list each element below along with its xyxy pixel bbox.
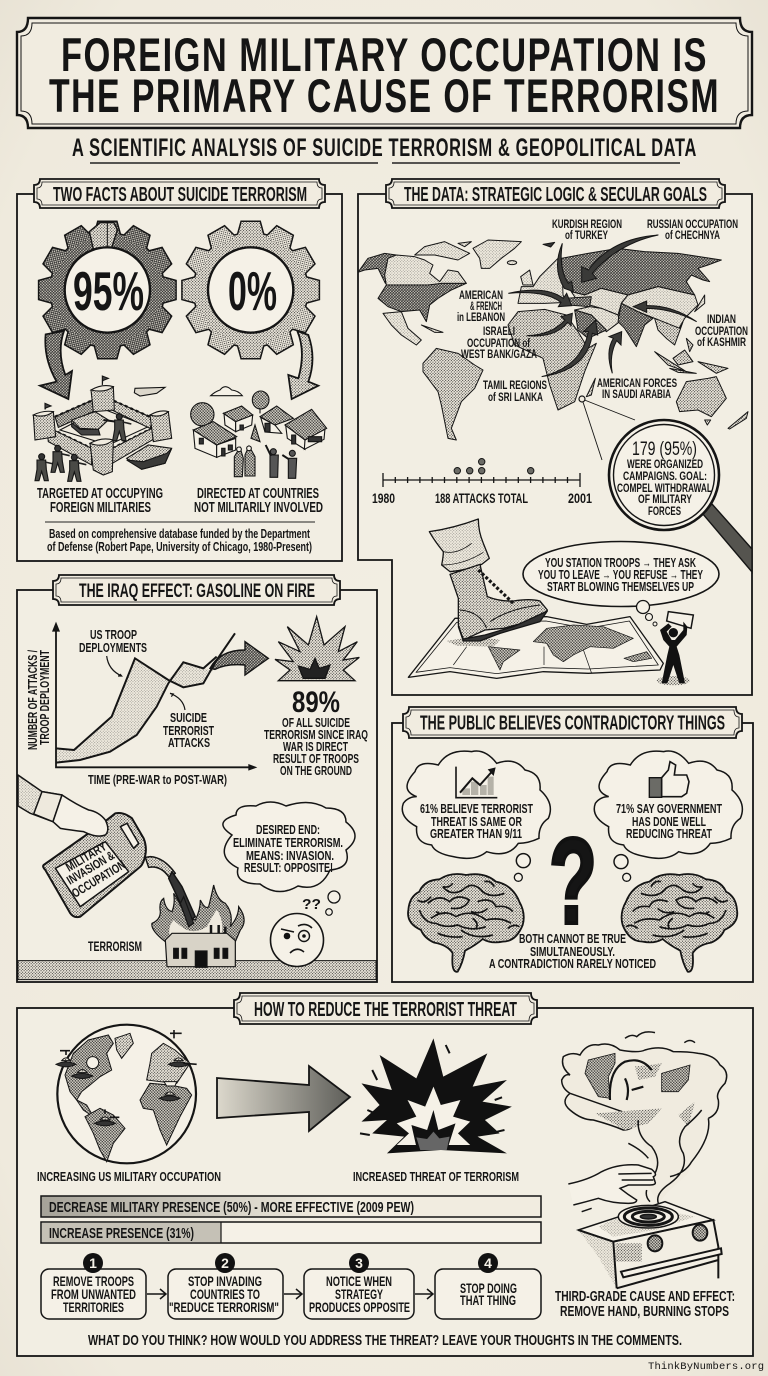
heading: contradictory beliefs [403,707,742,738]
source note [45,522,315,554]
heading: two facts [34,179,325,208]
thought bubble: 71 percent: REDUCING THREAT [626,826,712,841]
bar: increase presence: INCREASE PRESENCE (31%) [49,1226,194,1242]
attribution: ThinkByNumbers.org [648,1361,764,1373]
illustration: fort with tanks and soldiers [33,376,172,481]
map labels [457,217,748,404]
arrow: step 3 to 4 [415,1289,433,1299]
stat: 89%: OF ALL SUICIDE [282,715,350,730]
magnifying glass callout: 179 (95%) [632,439,697,460]
occupation arrows [508,235,697,377]
step 1: REMOVE TROOPS [53,1273,134,1289]
panel: the Iraq effect [17,575,377,982]
stat: 89%: TERRORISM SINCE IRAQ [264,727,368,742]
step 3: STRATEGY [335,1286,383,1302]
illustration: hand pouring fuel can: MILITARY [63,839,110,875]
icon: question mark: ? [549,813,597,949]
thought bubble: desired end: ELIMINATE TERRORISM. [233,835,343,850]
world map [358,240,748,440]
step 4: THAT THING [460,1292,516,1308]
illustration: hand pouring fuel can [18,775,195,923]
step 2: COUNTRIES TO [190,1286,260,1302]
thought bubble: desired end: RESULT: OPPOSITE! [244,860,333,875]
map labels: AMERICAN [459,288,503,302]
icon: large explosion [360,1038,512,1153]
map labels: INDIAN [707,312,736,326]
stat: 95%: 95% [73,260,144,322]
drawn illustrations: gears and arrows [39,222,319,399]
timeline: 1980 to 2001: 188 ATTACKS TOTAL [435,491,528,506]
stat: 89%: RESULT OF TROOPS [273,751,359,766]
step 3: PRODUCES OPPOSITE [309,1299,410,1315]
map labels: WEST BANK/GAZA [461,347,537,361]
icon: confused face: ?? [302,896,321,913]
gear: 95 percent [39,222,175,358]
title text [49,28,720,122]
illustration: smoke, hand and stove [562,1032,727,1288]
heading: how to reduce [234,993,537,1024]
speech bubble: troops to leave: START BLOWING THEMSELVES UP [547,580,694,594]
thought bubble: 61 percent: 61% BELIEVE TERRORIST [420,801,533,816]
source note: Based on comprehensive database funded by the Department [49,527,311,541]
stat: 0%: 0% [228,260,277,322]
step 3 [304,1253,414,1319]
gear: 0 percent [183,222,319,358]
panel: the data [358,179,752,695]
timeline: 1980 to 2001: 2001 [568,491,592,506]
map labels: of KASHMIR [697,335,746,349]
line chart: DEPLOYMENTS [79,640,147,655]
caption: increased threat: INCREASED THREAT OF TERRORISM [353,1169,519,1184]
line chart: TROOP DEPLOYMENT [38,650,52,745]
illustration: hand pouring fuel can: OCCUPATION [69,858,128,901]
step 1: TERRITORIES [63,1299,124,1315]
thought bubble: 61 percent: THREAT IS SAME OR [431,814,522,829]
step 4: 4 [484,1255,492,1271]
arrow: to occupied fort [40,331,72,399]
map labels: ISRAELI [483,324,515,338]
caption: occupying militaries: FOREIGN MILITARIES [50,500,151,516]
magnifying glass callout: COMPEL WITHDRAWAL [617,481,712,495]
illustration: hand pouring fuel can: INVASION & [64,848,117,888]
stat: 89%: ON THE GROUND [280,763,352,778]
icon: globe with tanks [56,1025,197,1163]
map labels: of TURKEY [565,228,608,242]
line chart: US TROOP [90,627,137,642]
stat: 89% [264,686,368,778]
contradiction note: A CONTRADICTION RARELY NOTICED [489,956,656,971]
magnifying glass callout [579,396,752,572]
icon: brain left [408,874,524,972]
caption: occupying militaries [37,486,163,516]
step 2: 2 [221,1255,229,1271]
speech bubble: troops to leave [523,542,719,626]
contradiction note [489,931,656,971]
caption: uninvolved countries [194,486,323,516]
map labels: of SRI LANKA [488,390,543,404]
caption: uninvolved countries: DIRECTED AT COUNTRIES [197,486,319,502]
arrow: occupation to threat [217,1066,350,1131]
step 1 [41,1253,146,1319]
magnifying glass callout: CAMPAIGNS. GOAL: [623,469,707,483]
map labels: & FRENCH [470,299,502,313]
panel: two facts [17,179,342,561]
stat: 89%: WAR IS DIRECT [283,739,348,754]
icon: brain right [622,874,737,972]
step 2: "REDUCE TERRORISM" [169,1299,279,1315]
bar: decrease presence: DECREASE MILITARY PRESENCE (50%) - MORE EFFECTIVE (2009 PEW) [49,1200,414,1216]
step 1: FROM UNWANTED [51,1286,136,1302]
line chart: SUICIDE [170,710,207,725]
subtitle rule [90,162,680,164]
stat: 89%: 89% [292,686,340,719]
arrow: step 1 to 2 [147,1289,166,1299]
stick figure with protest sign [657,612,693,685]
illustration: ground band [18,961,376,980]
icon: explosion [275,617,359,681]
source note: of Defense (Robert Pape, University of Chicago, 1980-Present) [47,540,312,554]
step 3: 3 [355,1255,363,1271]
illustration: boot stomping on map [408,519,663,678]
line chart: TERRORIST [163,723,214,738]
heading: how to reduce: HOW TO REDUCE THE TERRORIST THREAT [254,999,517,1021]
heading: the data [386,179,725,208]
caption: uninvolved countries: NOT MILITARILY INVOLVED [194,500,323,516]
map labels: IN SAUDI ARABIA [602,387,671,401]
map labels: TAMIL REGIONS [483,378,547,392]
line chart: ATTACKS [168,735,210,750]
speech bubble: troops to leave: YOU STATION TROOPS → THEY ASK [545,556,696,570]
line chart: TIME (PRE-WAR to POST-WAR) [88,772,227,787]
line chart: NUMBER OF ATTACKS / [26,650,40,750]
line chart [26,622,268,787]
step 4: STOP DOING [460,1280,517,1296]
step 4 [435,1253,541,1319]
map labels: in LEBANON [457,310,505,324]
magnifying glass callout: OF MILITARY [638,492,693,506]
caption: increasing occupation: INCREASING US MILITARY OCCUPATION [37,1169,221,1184]
caption: third-grade cause and effect [555,1289,735,1320]
arrow: to village [288,331,318,399]
thought bubble: 71 percent: HAS DONE WELL [632,814,706,829]
heading: Iraq effect [53,575,340,605]
contradiction note: SIMULTANEOUSLY. [530,944,615,959]
thought bubble: desired end: DESIRED END: [256,822,320,837]
map labels: KURDISH REGION [552,217,622,231]
illustration: burning building [152,885,244,967]
title plaque [17,18,752,128]
map labels: of CHECHNYA [665,228,720,242]
step 1: 1 [89,1255,97,1271]
map labels: AMERICAN FORCES [597,376,677,390]
panel: contradictory beliefs [392,707,753,982]
step 3: NOTICE WHEN [326,1273,392,1289]
step 2 [168,1253,283,1319]
illustration: peaceful village [191,387,327,478]
icon: confused face [270,896,324,966]
arrow: step 2 to 3 [284,1289,302,1299]
step 2: STOP INVADING [188,1273,262,1289]
thought bubble: 61 percent: GREATER THAN 9/11 [430,826,522,841]
contradiction note: BOTH CANNOT BE TRUE [519,931,626,946]
heading: two facts: TWO FACTS ABOUT SUICIDE TERRORISM [53,184,307,206]
heading: Iraq effect: THE IRAQ EFFECT: GASOLINE ON FIRE [79,580,315,602]
thought bubble: desired end [223,802,355,915]
caption: occupying militaries: TARGETED AT OCCUPYING [37,486,163,502]
timeline: 1980 to 2001 [372,458,592,506]
map labels: OCCUPATION of [467,336,531,350]
thought bubble: desired end: MEANS: INVASION. [246,848,334,863]
thought bubble: 71 percent [594,751,742,881]
magnifying glass callout: WERE ORGANIZED [627,457,703,471]
label: terrorism: TERRORISM [88,939,142,954]
bar: increase presence [41,1222,541,1243]
magnifying glass callout: FORCES [648,504,681,518]
thought bubble: 61 percent [402,751,550,881]
thought bubble: 71 percent: 71% SAY GOVERNMENT [616,801,722,816]
panel: how to reduce [17,993,753,1356]
timeline: 1980 to 2001: 1980 [372,491,395,506]
